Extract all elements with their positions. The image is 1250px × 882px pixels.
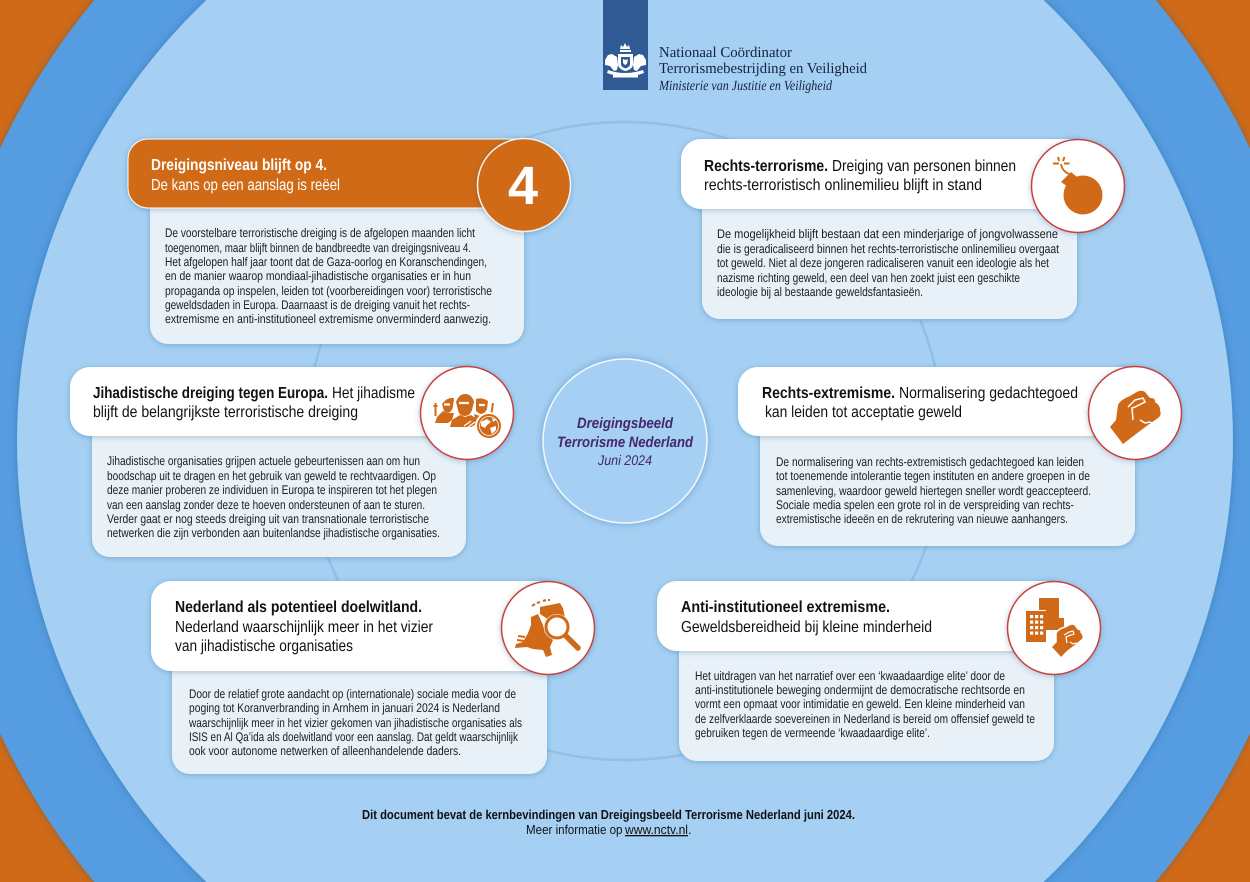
body text box: anti-institutionele beweging ondermijnt de democratische rechtsorde en bbox=[695, 683, 1025, 697]
background: faint inner ring bbox=[306, 122, 944, 760]
body text box bbox=[760, 432, 1135, 546]
heading bar: blijft de belangrijkste terroristische dreiging bbox=[93, 404, 358, 421]
body text box: Door de relatief grote aandacht op (internationale) sociale media voor de bbox=[189, 687, 516, 701]
body text box bbox=[172, 667, 547, 774]
organisation name: Nationaal Coördinator bbox=[659, 45, 792, 61]
body text box: De mogelijkheid blijft bestaan dat een minderjarige of jongvolwassene bbox=[717, 227, 1058, 241]
body text box: Jihadistische organisaties grijpen actuele gebeurtenissen aan om hun bbox=[107, 454, 420, 468]
footer note: www.nctv.nl bbox=[624, 822, 688, 837]
icon: masked fighters with globe bbox=[420, 366, 514, 460]
heading bar: Jihadistische dreiging tegen Europa. bbox=[93, 385, 328, 402]
centre badge: Juni 2024 bbox=[597, 452, 652, 468]
centre badge: Terrorisme Nederland bbox=[557, 434, 694, 451]
heading bar: van jihadistische organisaties bbox=[175, 638, 353, 655]
panel: dreigingsniveau bbox=[128, 138, 570, 344]
heading bar bbox=[70, 367, 467, 436]
organisation name: Terrorismebestrijding en Veiligheid bbox=[659, 61, 867, 77]
body text box: extremistische ideeën en de rekrutering van nieuwe aanhangers. bbox=[776, 512, 1068, 526]
heading bar bbox=[657, 581, 1054, 651]
heading bar bbox=[151, 581, 548, 671]
heading bar bbox=[738, 367, 1135, 436]
level 4 badge: 4 bbox=[508, 156, 538, 216]
body text box: geweldsdaden in Europa. Daarnaast is de dreiging vanuit het rechts- bbox=[165, 298, 470, 312]
heading bar: rechts-terroristisch onlinemilieu blijft in stand bbox=[704, 177, 982, 194]
icon: buildings and fist bbox=[1008, 582, 1100, 674]
body text box: nazisme richting geweld, een deel van hen zoekt juist een geschikte bbox=[717, 271, 1020, 285]
body text box: boodschap uit te dragen en het gebruik van geweld te rechtvaardigen. Op bbox=[107, 469, 436, 483]
icon: bomb bbox=[1032, 140, 1124, 232]
centre badge bbox=[543, 359, 707, 523]
body text box: die is geradicaliseerd binnen het rechts-terroristische onlinemilieu overgaat bbox=[717, 242, 1059, 256]
body text box: extremisme en anti-institutioneel extremisme onverminderd aanwezig. bbox=[165, 312, 491, 326]
heading bar: Nederland waarschijnlijk meer in het vizier bbox=[175, 619, 434, 636]
organisation name: Ministerie van Justitie en Veiligheid bbox=[658, 79, 833, 94]
body text box: De voorstelbare terroristische dreiging is de afgelopen maanden licht bbox=[165, 226, 475, 240]
logo and organisation name bbox=[603, 0, 867, 94]
footer note: . bbox=[688, 822, 692, 837]
body text box bbox=[92, 432, 466, 557]
heading bar bbox=[681, 139, 1078, 209]
panel: nederland als doelwitland bbox=[151, 581, 594, 774]
heading bar: Rechts-extremisme. bbox=[762, 385, 895, 402]
body text box: netwerken die zijn verbonden aan buitenlandse jihadistische organisaties. bbox=[107, 526, 440, 540]
body text box: gebruiken tegen de vermeende ‘kwaadaardige elite’. bbox=[695, 726, 930, 740]
body text box: van een aanslag zonder deze te hoeven ondersteunen of aan te sturen. bbox=[107, 498, 425, 512]
heading bar: Het jihadisme bbox=[332, 385, 415, 402]
heading bar: Rechts-terrorisme. bbox=[704, 158, 828, 175]
footer note: Meer informatie op bbox=[526, 822, 622, 837]
icon: raised fist bbox=[1088, 366, 1182, 460]
organisation name bbox=[658, 45, 867, 94]
logo: blue ribbon with crest bbox=[603, 0, 648, 90]
body text box: deze manier proberen ze individuen in Europa te inspireren tot het plegen bbox=[107, 483, 437, 497]
footer note: Dit document bevat de kernbevindingen van Dreigingsbeeld Terrorisme Nederland juni 2024. bbox=[362, 807, 855, 822]
body text box: ISIS en Al Qa’ida als doelwitland voor een aanslag. Dat geldt waarschijnlijk bbox=[189, 730, 519, 744]
icon: map of the Netherlands under magnifier bbox=[502, 582, 594, 674]
body text box: Het afgelopen half jaar toont dat de Gaza-oorlog en Koranschendingen, bbox=[165, 255, 487, 269]
body text box bbox=[702, 205, 1077, 319]
body text box: propaganda op inspelen, leiden tot (voorbereidingen voor) terroristische bbox=[165, 284, 492, 298]
body text box: tot geweld. Niet al deze jongeren radicaliseren vanuit een ideologie als het bbox=[717, 256, 1049, 270]
level 4 badge bbox=[478, 138, 570, 232]
panel: jihadistische dreiging bbox=[70, 366, 514, 557]
heading bar: kan leiden tot acceptatie geweld bbox=[765, 404, 962, 421]
panel: rechts-extremisme bbox=[738, 366, 1182, 546]
heading bar: De kans op een aanslag is reëel bbox=[151, 177, 340, 194]
body text box: de zelfverklaarde soevereinen in Nederland is bereid om offensief geweld te bbox=[695, 712, 1035, 726]
body text box: vormt een opmaat voor intimidatie en geweld. Een kleine minderheid van bbox=[695, 697, 1025, 711]
body text box bbox=[679, 647, 1054, 761]
body text box: waarschijnlijk meer in het vizier gekomen van jihadistische organisaties als bbox=[188, 716, 522, 730]
heading bar: Normalisering gedachtegoed bbox=[899, 385, 1078, 402]
body text box: ook voor autonome netwerken of alleenhandelende daders. bbox=[189, 744, 461, 758]
centre badge: Dreigingsbeeld bbox=[577, 415, 674, 432]
body text box: De normalisering van rechts-extremistisch gedachtegoed kan leiden bbox=[776, 455, 1084, 469]
body text box: samenleving, waardoor geweld hiertegen sneller wordt geaccepteerd. bbox=[776, 484, 1091, 498]
body text box: tot toenemende intolerantie tegen instituten en andere groepen in de bbox=[776, 469, 1090, 483]
body text box: ideologie bij al bestaande geweldsfantasieën. bbox=[717, 285, 923, 299]
heading bar: Dreigingsniveau blijft op 4. bbox=[151, 157, 327, 174]
body text box: Verder gaat er nog steeds dreiging uit van transnationale terroristische bbox=[107, 512, 429, 526]
body text box: Het uitdragen van het narratief over een ‘kwaadaardige elite’ door de bbox=[695, 669, 1005, 683]
body text box bbox=[150, 205, 524, 344]
panel: anti-institutioneel extremisme bbox=[657, 581, 1100, 761]
body text box: poging tot Koranverbranding in Arnhem in januari 2024 is Nederland bbox=[189, 701, 500, 715]
body text box: en de manier waarop mondiaal-jihadistische organisaties er in hun bbox=[165, 269, 471, 283]
heading bar: Anti-institutioneel extremisme. bbox=[681, 599, 890, 616]
body text box: toegenomen, maar blijft binnen de bandbreedte van dreigingsniveau 4. bbox=[165, 241, 471, 255]
heading bar: Geweldsbereidheid bij kleine minderheid bbox=[681, 619, 932, 636]
heading bar: Nederland als potentieel doelwitland. bbox=[175, 599, 422, 616]
heading bar: Dreiging van personen binnen bbox=[832, 158, 1016, 175]
footer note bbox=[362, 807, 855, 837]
body text box: Sociale media spelen een grote rol in de verspreiding van rechts- bbox=[776, 498, 1074, 512]
heading bar bbox=[128, 139, 524, 208]
panel: rechts-terrorisme bbox=[681, 139, 1124, 319]
